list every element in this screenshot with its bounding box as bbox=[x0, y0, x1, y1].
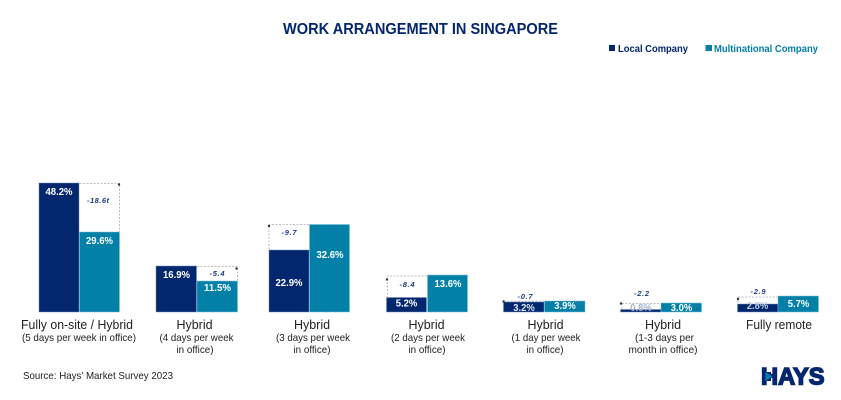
group: hybrid, 4 days: Hybrid bbox=[176, 318, 213, 332]
group: hybrid, 4 days: -5.4 bbox=[210, 269, 225, 278]
group: fully on-site / hybrid, 5 days: 48.2% bbox=[46, 186, 73, 198]
group: hybrid, 1 day: 3.2% bbox=[513, 302, 535, 314]
group: fully remote: Fully remote bbox=[746, 318, 812, 332]
group: fully remote: -2.9 bbox=[750, 287, 766, 296]
group: hybrid, 1 day: 3.9% bbox=[554, 300, 576, 312]
group: hybrid, 4 days: (4 days per week bbox=[160, 333, 234, 344]
group: hybrid, 1 day: -0.7 bbox=[518, 292, 533, 301]
group: hybrid, 1 day: in office) bbox=[526, 345, 564, 356]
group: hybrid, 4 days: 11.5% bbox=[204, 282, 232, 294]
group: hybrid, 2 days: -8.4 bbox=[400, 280, 415, 289]
group: hybrid, 3 days: (3 days per week bbox=[276, 333, 351, 344]
group: hybrid, 3 days: 32.6% bbox=[316, 249, 344, 261]
group: fully on-site / hybrid, 5 days: (5 days per week in office) bbox=[22, 333, 136, 344]
group: fully remote bbox=[737, 287, 818, 332]
group: hybrid, 3 days: in office) bbox=[294, 345, 330, 356]
logo: Hays: HAYS bbox=[761, 364, 824, 390]
group: hybrid, 1 day: (1 day per week bbox=[512, 333, 581, 344]
group: hybrid, 2 days: in office) bbox=[408, 345, 446, 356]
legend: local company: Local Company bbox=[618, 43, 688, 55]
group: hybrid, 2 days: 13.6% bbox=[434, 278, 462, 290]
group: hybrid, 2 days bbox=[386, 275, 468, 356]
group: hybrid, 2 days: 5.2% bbox=[396, 298, 418, 310]
group: hybrid, 2 days: (2 days per week bbox=[391, 333, 466, 344]
source note: Source: Hays' Market Survey 2023 bbox=[23, 370, 173, 382]
group: hybrid, 3 days: -9.7 bbox=[282, 228, 297, 237]
group: hybrid, 1-3 days per month: 0.8% bbox=[630, 302, 652, 314]
group: fully on-site / hybrid, 5 days: -18.6t bbox=[87, 196, 110, 205]
group: hybrid, 2 days: Hybrid bbox=[408, 318, 445, 332]
legend: multinational company: Multinational Company bbox=[714, 43, 818, 55]
group: hybrid, 1 day bbox=[502, 292, 585, 356]
group: hybrid, 1-3 days per month: (1-3 days per bbox=[635, 333, 695, 344]
group: hybrid, 1-3 days per month: month in office) bbox=[628, 345, 698, 356]
group: fully on-site / hybrid, 5 days: 29.6% bbox=[86, 235, 114, 247]
group: hybrid, 1-3 days per month bbox=[620, 289, 702, 356]
group: hybrid, 3 days: Hybrid bbox=[294, 318, 330, 332]
group: hybrid, 1-3 days per month: Hybrid bbox=[645, 318, 681, 332]
group: fully remote: 2.8% bbox=[747, 300, 769, 312]
title: WORK ARRANGEMENT IN SINGAPORE bbox=[283, 21, 558, 38]
group: fully on-site / hybrid, 5 days bbox=[21, 183, 136, 344]
legend bbox=[609, 43, 818, 55]
group: hybrid, 4 days: 16.9% bbox=[163, 269, 191, 281]
group: hybrid, 1-3 days per month: 3.0% bbox=[671, 302, 693, 314]
group: fully remote: 5.7% bbox=[788, 298, 810, 310]
group: hybrid, 1 day: Hybrid bbox=[527, 318, 564, 332]
group: hybrid, 3 days: 22.9% bbox=[276, 277, 303, 289]
group: hybrid, 4 days bbox=[156, 266, 238, 356]
group: hybrid, 3 days bbox=[268, 224, 351, 356]
group: hybrid, 1-3 days per month: -2.2 bbox=[634, 289, 650, 298]
group: fully on-site / hybrid, 5 days: Fully on-site / Hybrid bbox=[21, 318, 133, 332]
group: hybrid, 4 days: in office) bbox=[176, 345, 214, 356]
